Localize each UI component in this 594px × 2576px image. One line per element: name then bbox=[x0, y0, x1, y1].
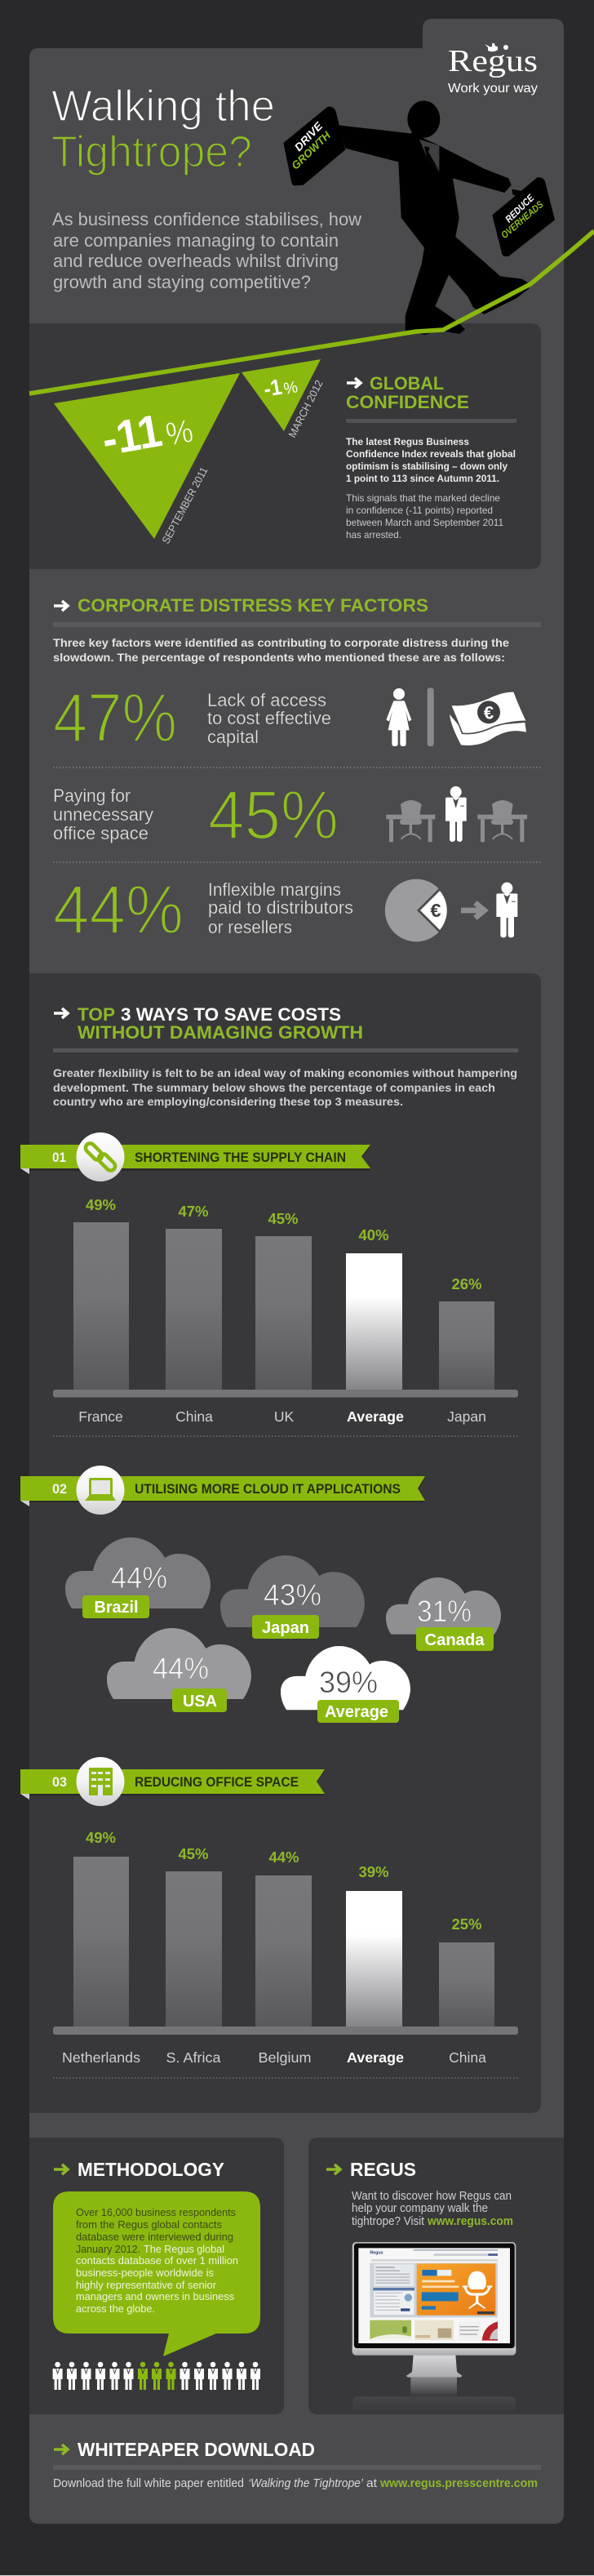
text: Regus invitation: help your company walk the bbox=[352, 2202, 488, 2215]
monitor bbox=[352, 2242, 516, 2413]
speech bubble: highly representative of senior bbox=[76, 2280, 216, 2291]
bar chart: office space: S. Africa bbox=[166, 2049, 221, 2066]
cloud: Japan bbox=[220, 1555, 365, 1639]
tightrope bbox=[29, 231, 594, 394]
text: greater flexibility: Greater flexibility is felt to be an ideal way of making economies without hampering bbox=[53, 1066, 517, 1079]
icon: man bbox=[446, 786, 467, 842]
bar chart: supply chain: 47% bbox=[178, 1203, 209, 1220]
stat: 45% bbox=[53, 776, 339, 853]
bar chart: supply chain: Japan bbox=[447, 1408, 486, 1425]
heading: top 3 ways bbox=[53, 1004, 518, 1052]
logo: Regus: Regus bbox=[448, 44, 538, 78]
cloud: Canada: Canada bbox=[424, 1631, 485, 1649]
briefcase: reduce overheads bbox=[492, 177, 555, 256]
stat: 45%: unnecessary bbox=[53, 804, 153, 825]
text: confidence index: The latest Regus Business bbox=[346, 436, 469, 447]
heading: top 3 ways: 3 WAYS TO SAVE COSTS bbox=[121, 1004, 341, 1025]
stat: 47% bbox=[53, 679, 331, 756]
text: confidence index: Confidence Index reveals that global bbox=[346, 448, 516, 460]
bar chart: supply chain: China bbox=[175, 1408, 213, 1425]
speech bubble: contacts database of over 1 million bbox=[76, 2255, 238, 2267]
heading: top 3 ways: TOP bbox=[78, 1004, 115, 1025]
cloud: USA: 44% bbox=[153, 1652, 209, 1685]
text: confidence index: optimism is stabilising – down only bbox=[346, 460, 508, 472]
cloud: USA: USA bbox=[183, 1693, 217, 1711]
panel: methodology bbox=[29, 2138, 284, 2414]
title: Tightrope? bbox=[51, 127, 252, 176]
logo: Regus bbox=[448, 43, 538, 96]
bar chart: supply chain: Average bbox=[347, 1408, 404, 1425]
icon: chain bbox=[84, 1141, 117, 1172]
heading: whitepaper download: WHITEPAPER DOWNLOAD bbox=[78, 2439, 315, 2460]
icon: left desk bbox=[386, 800, 435, 842]
panel: global confidence bbox=[29, 323, 541, 569]
text: Regus invitation: Want to discover how Regus can bbox=[352, 2190, 512, 2203]
bar chart: supply chain: 49% bbox=[86, 1196, 116, 1213]
heading: corporate distress: CORPORATE DISTRESS KEY FACTORS bbox=[78, 595, 428, 616]
title: Walking the bbox=[51, 82, 275, 131]
title bbox=[51, 82, 275, 176]
ribbon 01: 01 bbox=[52, 1150, 66, 1165]
text: marked decline bbox=[346, 492, 503, 541]
speech bubble: managers and owners in business bbox=[76, 2291, 234, 2302]
briefcase: drive growth: GROWTH bbox=[289, 129, 333, 171]
text: marked decline: has arrested. bbox=[346, 529, 401, 541]
heading: methodology: METHODOLOGY bbox=[78, 2159, 224, 2180]
text: intro: Three key factors were identified as contributing to corporate distress during the bbox=[53, 636, 509, 649]
briefcase: drive growth bbox=[283, 107, 345, 185]
bar chart: office space: 25% bbox=[451, 1915, 482, 1933]
ribbon 02: UTILISING MORE CLOUD IT APPLICATIONS bbox=[135, 1481, 401, 1497]
text: marked decline: in confidence (-11 points) reported bbox=[346, 505, 493, 516]
intro text: are companies managing to contain bbox=[53, 230, 339, 251]
bar chart: office space: 45% bbox=[178, 1845, 209, 1862]
intro text: and reduce overheads whilst driving bbox=[53, 251, 339, 271]
text: confidence index: 1 point to 113 since Autumn 2011. bbox=[346, 473, 499, 484]
website screenshot: Regus bbox=[370, 2251, 383, 2256]
silhouette bbox=[339, 100, 530, 335]
speech bubble: The Regus global bbox=[144, 2244, 224, 2255]
bar chart: office space: Average bbox=[347, 2049, 404, 2066]
bar chart: office space: China bbox=[449, 2049, 486, 2066]
stat: 45%: office space bbox=[53, 823, 148, 843]
bar chart: office space: 44% bbox=[268, 1849, 299, 1866]
cloud: Brazil: 44% bbox=[111, 1561, 167, 1595]
cloud: Canada: 31% bbox=[417, 1595, 472, 1628]
speech bubble bbox=[53, 2191, 260, 2356]
bar chart: office space: 49% bbox=[86, 1829, 116, 1846]
figure: businessman on tightrope bbox=[283, 100, 555, 335]
ribbon 02 bbox=[20, 1466, 425, 1515]
ribbon 01 bbox=[20, 1132, 370, 1181]
text: intro bbox=[53, 636, 509, 664]
stat: 45%: 45% bbox=[208, 776, 339, 853]
ribbon 03: 03 bbox=[52, 1774, 67, 1790]
speech bubble: database were interviewed during bbox=[76, 2231, 233, 2243]
icon: desks and man bbox=[386, 786, 527, 842]
briefcase: drive growth: DRIVE bbox=[292, 119, 326, 153]
text: Regus invitation bbox=[352, 2190, 513, 2228]
section: whitepaper download bbox=[53, 2439, 541, 2490]
triangle: September 2011 bbox=[54, 373, 240, 545]
cloud: Average bbox=[281, 1646, 410, 1723]
icon row: people bbox=[53, 2362, 260, 2390]
briefcase: reduce overheads: REDUCE bbox=[503, 192, 537, 225]
ribbon 03 bbox=[20, 1757, 325, 1806]
text: whitepaper link: at bbox=[366, 2477, 377, 2490]
text: greater flexibility: country who are employing/considering these top 3 measures. bbox=[53, 1095, 403, 1108]
stat: 44% bbox=[53, 871, 353, 948]
cloud: Japan: 43% bbox=[264, 1578, 321, 1612]
speech bubble: January 2012. bbox=[76, 2244, 140, 2255]
bar chart: supply chain: 26% bbox=[451, 1275, 482, 1292]
bar chart: supply chain: 40% bbox=[358, 1226, 389, 1244]
stat: 44%: Inflexible margins bbox=[208, 879, 341, 900]
intro text: As business confidence stabilises, how bbox=[52, 209, 361, 229]
stat: 44%: 44% bbox=[53, 871, 184, 948]
stat: 47%: Lack of access bbox=[207, 690, 326, 710]
website screenshot bbox=[358, 2248, 510, 2343]
cloud: Brazil: Brazil bbox=[95, 1599, 139, 1617]
icon: pie, arrow and man bbox=[385, 879, 517, 941]
text: marked decline: This signals that the marked decline bbox=[346, 492, 500, 504]
section: corporate distress key factors bbox=[53, 595, 541, 948]
speech bubble: business-people worldwide is bbox=[76, 2267, 214, 2279]
panel: top 3 ways to save costs bbox=[20, 973, 541, 2113]
panel: Regus bbox=[308, 2138, 564, 2414]
bar chart: office space: 39% bbox=[358, 1863, 389, 1880]
text: intro: slowdown. The percentage of respondents who mentioned these are as follows: bbox=[53, 651, 505, 664]
ribbon 02: 02 bbox=[52, 1481, 67, 1497]
text: whitepaper link: www.regus.presscentre.com bbox=[379, 2477, 538, 2490]
heading: global confidence bbox=[346, 373, 516, 423]
bar chart: supply chain bbox=[53, 1196, 518, 1425]
triangle: March 2012: MARCH 2012 bbox=[286, 378, 326, 439]
stat: 47%: capital bbox=[207, 727, 259, 747]
text: whitepaper link: Download the full white paper entitled bbox=[53, 2477, 244, 2490]
bar chart: office space: Netherlands bbox=[62, 2049, 140, 2066]
heading: Regus: REGUS bbox=[350, 2159, 416, 2180]
icon: woman, bar and money: € bbox=[484, 702, 494, 723]
text: greater flexibility: development. The summary below shows the percentage of companies in each bbox=[53, 1081, 495, 1094]
heading: whitepaper download bbox=[53, 2439, 541, 2470]
heading: top 3 ways: WITHOUT DAMAGING GROWTH bbox=[78, 1022, 363, 1043]
triangle: September 2011: % bbox=[163, 413, 196, 453]
ribbon 03: REDUCING OFFICE SPACE bbox=[135, 1774, 299, 1790]
cloud: USA bbox=[107, 1628, 251, 1712]
speech bubble: Over 16,000 business respondents bbox=[76, 2207, 236, 2218]
icon: pie, arrow and man: € bbox=[431, 900, 441, 921]
intro text: growth and staying competitive? bbox=[53, 272, 311, 292]
stat: 45%: Paying for bbox=[53, 785, 131, 806]
icon: laptop bbox=[85, 1478, 116, 1501]
bar chart: supply chain: 45% bbox=[268, 1210, 299, 1227]
logo: Regus: Work your way bbox=[448, 82, 538, 96]
text: whitepaper link bbox=[53, 2477, 538, 2490]
cloud: Japan: Japan bbox=[262, 1619, 309, 1637]
text: whitepaper link: ‘Walking the Tightrope’ bbox=[248, 2477, 364, 2490]
stat: 44%: or resellers bbox=[208, 917, 292, 937]
bar chart: supply chain: UK bbox=[274, 1408, 294, 1425]
triangle: March 2012 bbox=[242, 359, 326, 439]
bar chart: supply chain: France bbox=[78, 1408, 123, 1425]
cloud: Brazil bbox=[65, 1537, 211, 1618]
heading: global confidence: GLOBAL bbox=[370, 373, 444, 394]
cloud: Canada bbox=[386, 1577, 501, 1651]
icon: office building bbox=[89, 1768, 113, 1795]
stat: 44%: paid to distributors bbox=[208, 897, 353, 918]
stat: 47%: to cost effective bbox=[207, 708, 331, 728]
bar chart: office space bbox=[53, 1829, 518, 2066]
cloud: Average: 39% bbox=[319, 1666, 378, 1699]
triangle: September 2011: SEPTEMBER 2011 bbox=[159, 465, 210, 545]
icon: woman, bar and money bbox=[386, 687, 527, 746]
cloud: Average: Average bbox=[325, 1703, 388, 1721]
heading: corporate distress bbox=[53, 595, 541, 627]
speech bubble: across the globe. bbox=[76, 2303, 155, 2315]
stat: 47%: 47% bbox=[53, 679, 177, 756]
icon: white chair bbox=[463, 2271, 492, 2308]
icon: right desk bbox=[477, 800, 527, 842]
triangle: March 2012: -1 bbox=[262, 375, 284, 402]
text: marked decline: between March and September 2011 bbox=[346, 517, 503, 528]
briefcase: reduce overheads: OVERHEADS bbox=[499, 198, 546, 241]
heading: global confidence: CONFIDENCE bbox=[346, 392, 469, 412]
text: greater flexibility bbox=[53, 1066, 517, 1108]
bar chart: office space: Belgium bbox=[258, 2049, 312, 2066]
text: Regus invitation: tightrope? Visit bbox=[352, 2215, 424, 2228]
text: Regus invitation: www.regus.com bbox=[427, 2215, 513, 2228]
intro text bbox=[52, 209, 361, 292]
ribbon 01: SHORTENING THE SUPPLY CHAIN bbox=[135, 1150, 346, 1165]
triangle: September 2011: -11 bbox=[98, 404, 166, 465]
text: confidence index bbox=[346, 436, 516, 484]
triangle: March 2012: % bbox=[282, 378, 299, 398]
speech bubble: from the Regus global contacts bbox=[76, 2219, 222, 2231]
